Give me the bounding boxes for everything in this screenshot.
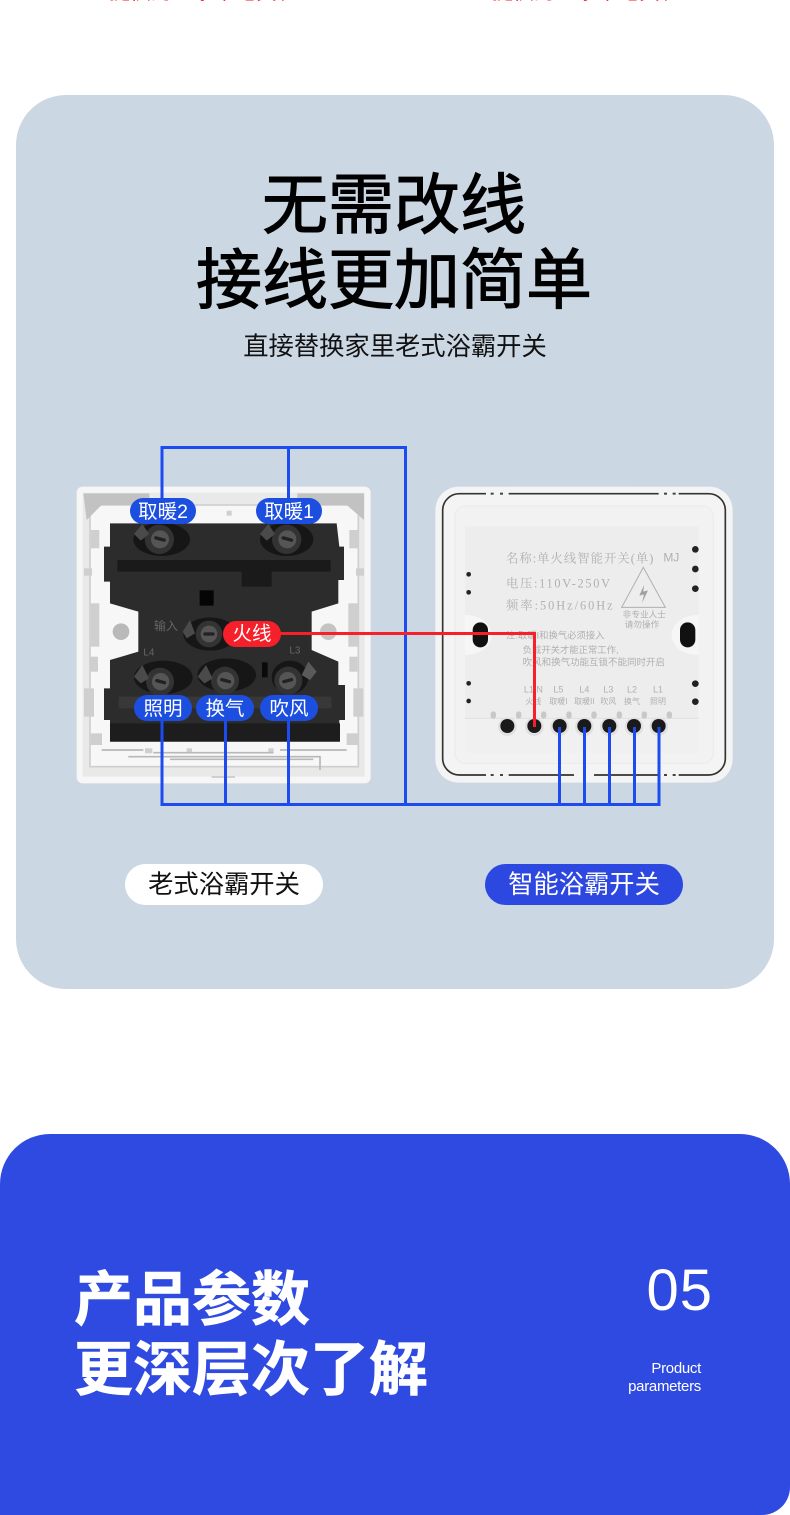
pill: smart switch: 智能浴霸开关 <box>508 871 660 899</box>
printed label text: L2 <box>627 685 637 695</box>
banner heading: 产品参数 <box>74 1267 310 1333</box>
printed label text: 注:取暖I和换气必须接入 <box>506 630 604 641</box>
printed label text: 非专业人士 <box>623 608 666 619</box>
panel: wiring comparison <box>16 95 774 989</box>
old switch back photo: 输入 <box>154 618 178 633</box>
frame detail <box>84 511 364 778</box>
printed label text: 吹风 <box>600 696 616 706</box>
printed label text: 取暖I <box>549 697 567 706</box>
printed label text: 换气 <box>624 696 640 706</box>
wire terminals <box>498 717 668 736</box>
printed label text: 电压:110V-250V <box>506 575 610 590</box>
printed label text: 火线 <box>525 696 541 706</box>
printed label text: 名称:单火线智能开关(单) <box>506 550 653 565</box>
section label: Product <box>651 1360 701 1377</box>
printed label text: L3 <box>603 685 613 695</box>
label: 取暖2 <box>130 498 196 524</box>
label: 换气 <box>196 695 254 721</box>
printed label text: 吹风和换气功能互锁不能同时开启 <box>523 656 665 668</box>
label: 取暖2: 取暖2 <box>138 501 188 523</box>
label: 火线 <box>223 621 281 647</box>
label: 换气: 换气 <box>205 698 245 720</box>
label: 吹风 <box>260 695 318 721</box>
label: 照明: 照明 <box>143 698 183 720</box>
printed label text: 取暖II <box>574 697 595 706</box>
label: 照明 <box>134 695 192 721</box>
printed label text: 负载开关才能正常工作, <box>523 644 619 655</box>
label: 吹风: 吹风 <box>269 698 309 720</box>
printed label text: 请勿操作 <box>625 619 660 630</box>
old switch back photo <box>77 487 371 783</box>
title: 无需改线 <box>262 168 526 242</box>
banner heading <box>74 1267 428 1403</box>
pill: old switch <box>125 864 323 905</box>
printed label text: L1 <box>653 685 663 695</box>
section label: parameters <box>628 1378 701 1394</box>
subtitle: 直接替换家里老式浴霸开关 <box>243 333 547 361</box>
section label <box>628 1360 702 1394</box>
pill: smart switch <box>485 864 683 905</box>
printed label text: 照明 <box>650 697 666 706</box>
old switch back photo: L3 <box>289 645 301 656</box>
red live wire <box>280 634 534 727</box>
printed label text: L1 N <box>524 685 543 695</box>
smart switch back photo <box>435 487 733 783</box>
blue wires <box>162 448 659 804</box>
side vents <box>466 546 699 705</box>
screw terminals <box>133 523 317 696</box>
printed label text: L4 <box>579 685 589 695</box>
label: 取暖1: 取暖1 <box>264 501 314 523</box>
terminal bumps <box>491 711 672 719</box>
label: 火线: 火线 <box>232 623 272 645</box>
printed label text <box>506 550 679 706</box>
title: 接线更加简单 <box>196 243 592 317</box>
banner heading: 更深层次了解 <box>74 1337 428 1403</box>
printed label text: 频率:50Hz/60Hz <box>506 597 613 612</box>
pill: old switch: 老式浴霸开关 <box>148 871 300 899</box>
printed label text: L5 <box>553 685 563 695</box>
title <box>196 168 592 317</box>
panel: product parameters banner <box>0 1134 790 1515</box>
printed label text: MJ <box>663 551 679 565</box>
old switch back photo: L4 <box>143 648 155 659</box>
section number: 05 <box>646 1258 713 1323</box>
label: 取暖1 <box>256 498 322 524</box>
